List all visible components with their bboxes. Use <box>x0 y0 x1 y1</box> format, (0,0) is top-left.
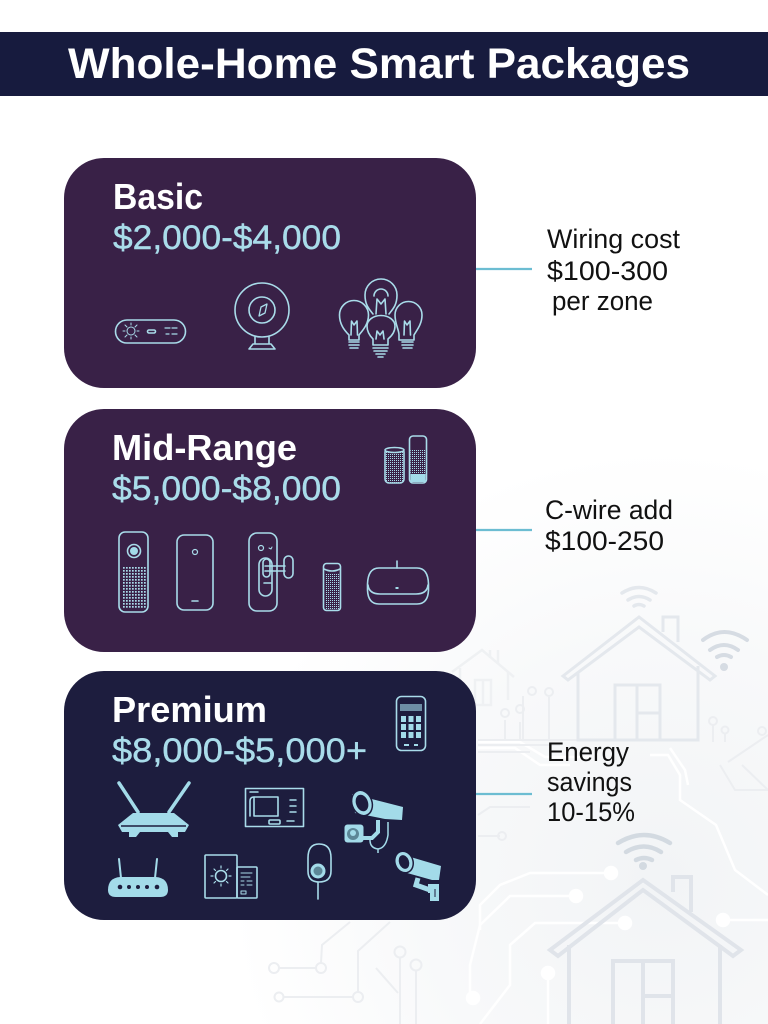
price: Mid-Range: $5,000-$8,000 <box>112 470 341 508</box>
background: wifi upper <box>622 588 656 606</box>
price: Premium: $8,000-$5,000+ <box>112 732 367 770</box>
icon: small router <box>108 859 168 897</box>
background: wifi lower <box>618 835 670 870</box>
panel: Basic <box>64 158 476 388</box>
icon: small speaker <box>324 564 340 610</box>
callout: wiring cost: $100-300 <box>547 256 668 286</box>
callout: wiring cost <box>547 224 680 316</box>
callout: wiring cost: per zone <box>552 286 653 316</box>
callout: energy savings: Energy <box>547 737 629 767</box>
connector: Mid-Range <box>476 529 532 531</box>
icon: large router <box>118 783 189 837</box>
callout: C-wire add <box>545 495 673 556</box>
connector: Premium <box>476 793 532 795</box>
icon: thermostat panels <box>205 855 257 898</box>
callout: wiring cost: Wiring cost <box>547 224 680 254</box>
callout: C-wire add: $100-250 <box>545 526 664 556</box>
callout: energy savings: 10-15% <box>547 797 635 827</box>
icon: smartphone app <box>396 696 426 750</box>
icon: video doorbell <box>119 532 148 612</box>
background illustration: circuit traces, houses and wifi <box>269 588 768 1024</box>
connector: Basic <box>476 268 532 270</box>
icon: light bulbs <box>340 279 422 357</box>
icon: touch panel <box>177 535 213 610</box>
icon: sensor <box>308 844 331 899</box>
callout: energy savings: savings <box>547 767 632 797</box>
heading: Mid-Range: Mid-Range <box>112 427 297 468</box>
icon: hub bar <box>116 320 186 343</box>
background: lower house <box>550 877 741 1024</box>
background: wifi right <box>703 632 747 671</box>
icon: smart lock <box>249 533 293 611</box>
title: Whole-Home Smart Packages <box>68 40 690 88</box>
icon: hub <box>368 561 428 604</box>
icon: camera <box>235 283 289 349</box>
background: upper house <box>563 617 715 740</box>
icon: smart speakers <box>385 436 426 483</box>
heading: Premium: Premium <box>112 689 267 730</box>
panel: Mid-Range <box>64 409 476 652</box>
heading: Basic: Basic <box>113 176 203 217</box>
icon: touch control panel <box>246 788 304 826</box>
title banner <box>0 32 768 96</box>
background: small faint house <box>452 650 514 705</box>
icon: security cameras <box>344 787 403 853</box>
callout: energy savings <box>547 737 635 827</box>
icon: wall camera <box>392 849 441 901</box>
callout: C-wire add: C-wire add <box>545 495 673 525</box>
price: Basic: $2,000-$4,000 <box>113 219 341 257</box>
panel: Premium <box>64 671 476 920</box>
